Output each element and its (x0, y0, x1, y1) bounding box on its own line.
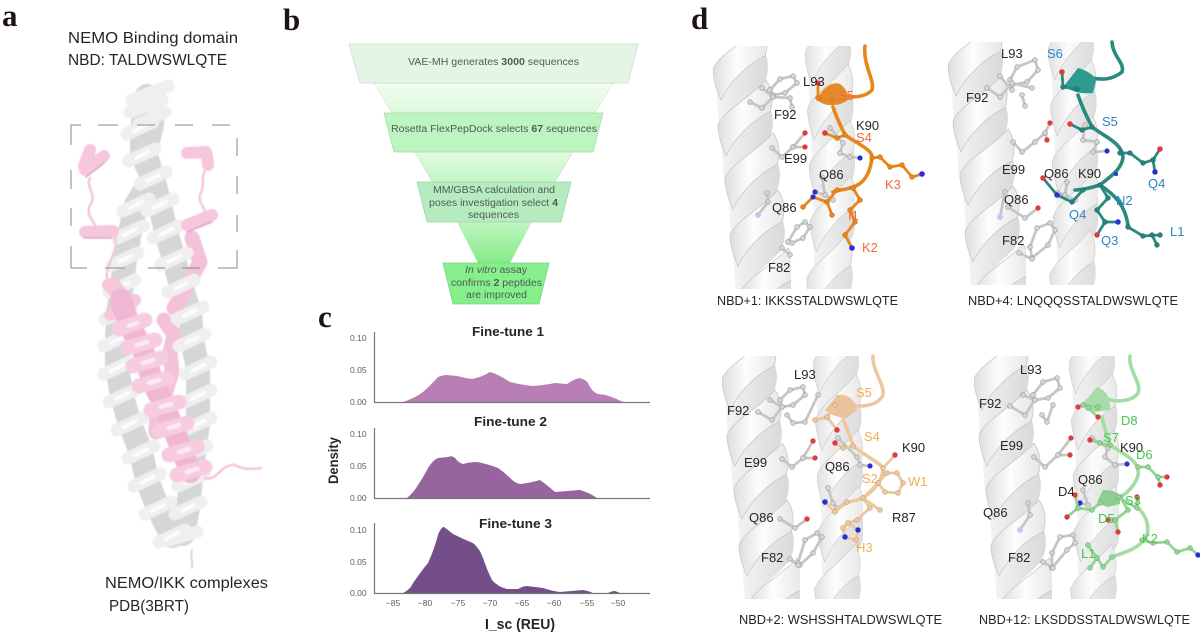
panel c: density plots (318, 299, 650, 633)
x axis ticks (386, 598, 625, 608)
peptide labels: S2 (862, 471, 878, 486)
receptor side chains (750, 76, 862, 255)
density plot: Fine-tune 3 (350, 517, 650, 598)
receptor side chains (758, 387, 872, 565)
residue labels (979, 362, 1143, 565)
x axis title: I_sc (REU) (485, 616, 555, 633)
peptide labels (1047, 46, 1184, 248)
residue labels (966, 46, 1101, 248)
residue labels: E99 (744, 455, 767, 470)
funnel step 3: poses investigation select 4 (429, 198, 558, 209)
peptide labels: K2 (1142, 531, 1158, 546)
residue labels: L93 (803, 74, 825, 89)
residue labels: F92 (979, 396, 1001, 411)
density plot: Fine-tune 2: Fine-tune 2 (474, 415, 547, 429)
peptide labels (838, 88, 901, 255)
panel b: screening funnel (283, 2, 638, 304)
residue labels: E99 (1002, 162, 1025, 177)
pose: NBD+12 (974, 318, 1200, 636)
density plot: Fine-tune 2: 0.05 (350, 461, 367, 471)
residue labels: E99 (784, 151, 807, 166)
peptide labels: S7 (1103, 430, 1119, 445)
caption: NBD+4: LNQQQSSTALDWSWLQTE (968, 294, 1178, 308)
dashed selection box (71, 125, 237, 268)
caption: NEMO/IKK complexes: NEMO/IKK complexes (105, 575, 268, 592)
residue labels: F92 (966, 90, 988, 105)
peptide labels: S6 (1047, 46, 1063, 61)
protein ribbon: grey helices and pink peptides (84, 86, 261, 568)
residue labels: F92 (727, 403, 749, 418)
density plot: Fine-tune 3: 0.10 (350, 525, 367, 535)
x axis ticks: −75 (451, 598, 465, 608)
caption: NBD+2: WSHSSHTALDWSWLQTE (739, 613, 942, 627)
peptide labels: I1 (848, 208, 859, 223)
funnel step 4: In vitro assay (465, 265, 527, 276)
heading: NEMO binding domain: NBD: TALDWSWLQTE (68, 52, 227, 69)
residue labels (768, 74, 879, 275)
caption: NEMO/IKK complexes (105, 575, 268, 615)
peptide labels: S5 (838, 88, 854, 103)
x axis ticks: −50 (611, 598, 625, 608)
residue labels: L93 (1001, 46, 1023, 61)
orange peptide (803, 46, 925, 251)
residue labels: Q86 (825, 459, 850, 474)
residue labels: K90 (902, 440, 925, 455)
panel letter b: b (283, 2, 300, 37)
residue labels: Q86 (1078, 472, 1103, 487)
caption: NEMO/IKK complexes: PDB(3BRT) (109, 598, 189, 615)
funnel step 3: sequences (468, 210, 519, 221)
density plot: Fine-tune 2: 0.10 (350, 429, 367, 439)
green peptide (1064, 356, 1200, 568)
pose: NBD+4 (948, 4, 1184, 348)
residue labels: L93 (794, 367, 816, 382)
helices (722, 318, 864, 636)
peptide labels: N2 (1116, 193, 1133, 208)
density plot: Fine-tune 3: 0.05 (350, 557, 367, 567)
funnel step 2: Rosetta FlexPepDock selects 67 sequences (391, 124, 597, 135)
residue labels: Q86 (772, 200, 797, 215)
peptide labels (1081, 413, 1158, 561)
residue labels: F82 (1002, 233, 1024, 248)
caption: NBD+1: IKKSSTALDWSWLQTE (717, 294, 898, 308)
density plot: Fine-tune 1: 0.05 (350, 365, 367, 375)
peptide labels: D5 (1098, 511, 1115, 526)
residue labels: Q86 (819, 167, 844, 182)
residue labels: R87 (892, 510, 916, 525)
peptide labels: L1 (1170, 224, 1184, 239)
residue labels: Q86 (749, 510, 774, 525)
peptide labels: S4 (856, 130, 872, 145)
heading: NEMO binding domain (68, 30, 238, 69)
residue labels: K90 (1078, 166, 1101, 181)
helices (974, 318, 1120, 636)
residue labels (727, 367, 925, 565)
density plot: Fine-tune 1 (350, 325, 650, 407)
density plot: Fine-tune 1: 0.00 (350, 397, 367, 407)
panel letter c: c (318, 299, 332, 334)
funnel step 2 (384, 113, 603, 152)
density plot: Fine-tune 2 (350, 415, 650, 503)
peptide labels: H3 (856, 540, 873, 555)
heading: NEMO binding domain: NEMO Binding domain (68, 30, 238, 47)
residue labels: F82 (761, 550, 783, 565)
x axis ticks: −60 (547, 598, 561, 608)
pose: NBD+1 (713, 8, 925, 352)
panel letter d: d (691, 1, 708, 36)
x axis ticks: −70 (483, 598, 497, 608)
residue labels: F92 (774, 107, 796, 122)
funnel step 4 (443, 263, 549, 304)
panel a: NEMO/IKK structure (2, 0, 268, 615)
residue labels: Q86 (983, 505, 1008, 520)
funnel connectors (374, 83, 613, 263)
residue labels: K90 (856, 118, 879, 133)
density plot: Fine-tune 2: 0.00 (350, 493, 367, 503)
peptide labels: L1 (1081, 546, 1095, 561)
pose: NBD+2 (722, 318, 942, 636)
x axis ticks: −55 (580, 598, 594, 608)
funnel step 4: are improved (466, 290, 527, 301)
density plot: Fine-tune 3: Fine-tune 3 (479, 517, 552, 531)
peptide labels: D8 (1121, 413, 1138, 428)
residue labels: D4 (1058, 484, 1075, 499)
receptor side chains (987, 60, 1110, 259)
density plot: Fine-tune 3: 0.00 (350, 588, 367, 598)
residue labels: F82 (768, 260, 790, 275)
tan peptide (815, 356, 903, 540)
residue labels: Q86 (1044, 166, 1069, 181)
helices (948, 4, 1099, 348)
teal peptide (1040, 42, 1163, 245)
receptor side chains (1010, 378, 1130, 568)
density plot: Fine-tune 1: Fine-tune 1 (472, 325, 544, 339)
caption: NBD+12: LKSDDSSTALDWSWLQTE (979, 613, 1190, 627)
peptide labels: Q3 (1101, 233, 1118, 248)
peptide labels: Q4 (1069, 207, 1086, 222)
residue labels: Q86 (1004, 192, 1029, 207)
x axis ticks: −85 (386, 598, 400, 608)
funnel step 3 (417, 182, 571, 222)
peptide labels (856, 385, 928, 555)
peptide labels: S5 (1102, 114, 1118, 129)
panel d: docked peptide poses (691, 1, 1200, 636)
peptide labels: W1 (908, 474, 928, 489)
helices (713, 8, 856, 352)
funnel step 4: confirms 2 peptides (451, 278, 542, 289)
peptide labels: S5 (856, 385, 872, 400)
peptide labels: S3 (1125, 493, 1141, 508)
peptide labels: Q4 (1148, 176, 1165, 191)
residue labels: F82 (1008, 550, 1030, 565)
funnel step 1: VAE-MH generates 3000 sequences (408, 57, 579, 68)
peptide labels: S4 (864, 429, 880, 444)
funnel step 3: MM/GBSA calculation and (433, 185, 555, 196)
peptide labels: D6 (1136, 447, 1153, 462)
peptide labels: K3 (885, 177, 901, 192)
funnel step 1 (349, 44, 638, 83)
x axis ticks: −80 (418, 598, 432, 608)
peptide labels: K2 (862, 240, 878, 255)
residue labels: E99 (1000, 438, 1023, 453)
residue labels: K90 (1120, 440, 1143, 455)
residue labels: L93 (1020, 362, 1042, 377)
y axis title: Density (325, 437, 341, 484)
x axis ticks: −65 (515, 598, 529, 608)
density plot: Fine-tune 1: 0.10 (350, 333, 367, 343)
